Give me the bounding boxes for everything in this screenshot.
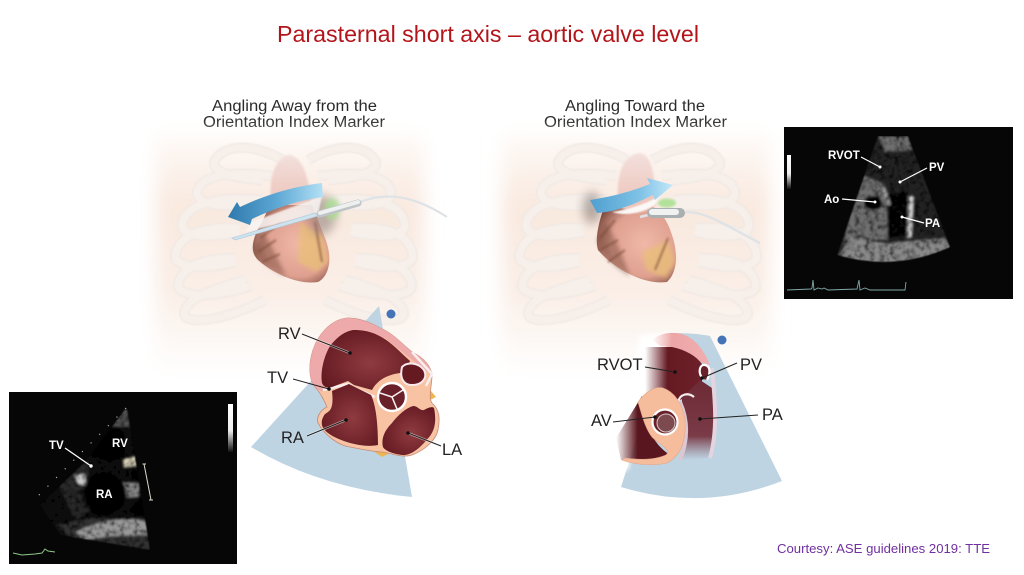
echo label: PV: PV: [929, 162, 945, 174]
chest background glow: [156, 135, 424, 375]
valve leaflet: [678, 394, 694, 402]
heart: [597, 205, 676, 282]
aortic valve: [378, 383, 406, 411]
label: LA: [406, 431, 462, 459]
panel: RVOT/PA short axis diagram: [591, 333, 783, 498]
heading: angling away: Orientation Index Marker: [203, 114, 385, 131]
shadow behind probe: [308, 195, 336, 235]
echo sector with speckle: [56, 408, 150, 550]
caliper: [142, 464, 153, 500]
label: RV: [278, 325, 352, 355]
right ventricle chamber: [321, 330, 410, 390]
yellow fat patches: [372, 385, 436, 457]
aortic root: [622, 388, 685, 465]
rotation arrow pointing right: [590, 178, 673, 213]
heading: angling toward: Orientation Index Marker: [544, 114, 727, 131]
label: RA: [281, 418, 348, 447]
label: PA: PA: [762, 406, 783, 424]
aortic valve ring: [652, 410, 678, 434]
echo background: [9, 392, 237, 564]
echo label: RVOT: RVOT: [828, 150, 860, 162]
heading: angling away: [203, 98, 385, 131]
imaging sector: [251, 306, 412, 497]
label: PA: [698, 406, 783, 424]
echo label: RVOT: [828, 150, 882, 168]
credit text: Courtesy: ASE guidelines 2019: TTE: [777, 541, 990, 556]
RVOT chamber: [645, 347, 702, 402]
lower left dark chamber: [616, 396, 670, 460]
panel: angling toward thorax: [502, 98, 770, 375]
orientation marker dot: [718, 336, 726, 344]
echo depth bar: [787, 155, 791, 189]
panel: echo image bottom left: [9, 392, 237, 564]
right atrium chamber: [322, 384, 378, 446]
rib cage: [175, 148, 413, 320]
label: TV: [267, 369, 331, 391]
title: Parasternal short axis – aortic valve level: [277, 21, 699, 47]
echo label: Ao: Ao: [824, 194, 839, 206]
aorta and great vessels: [271, 155, 312, 210]
aorta and great vessels: [618, 153, 656, 212]
label: RV: RV: [278, 325, 301, 343]
aortic wall strip: [680, 402, 686, 460]
echo label: PA: [900, 216, 940, 230]
imaging plane: [232, 213, 318, 240]
label: RA: RA: [281, 429, 304, 447]
green indicator glow: [658, 198, 676, 208]
heading: angling toward: Angling Toward the: [565, 98, 705, 115]
heading: angling away: Angling Away from the: [212, 98, 377, 115]
chest background glow: [502, 135, 770, 375]
echo label: RV: RV: [112, 438, 128, 450]
ECG trace: [13, 549, 55, 555]
panel: angling away thorax: [156, 98, 447, 375]
right ventricular wall: [652, 333, 710, 365]
white area under arrow: [245, 196, 322, 232]
RVOT chamber: [401, 364, 425, 385]
heart: [253, 205, 329, 283]
rib cage: [519, 148, 757, 320]
heading: angling toward: [544, 98, 727, 131]
probe and cable: [320, 196, 447, 217]
label: LA: LA: [442, 441, 462, 459]
orientation marker dot: [386, 310, 396, 318]
imaging sector: [621, 333, 782, 498]
rotation arrow pointing left: [228, 183, 323, 225]
echo label: TV: [49, 440, 93, 468]
sector edge dots: [32, 408, 126, 502]
echo label: PV: [898, 162, 945, 184]
label: AV: AV: [591, 412, 612, 430]
white highlight under arrow: [612, 196, 660, 214]
echo label: TV: TV: [49, 440, 64, 452]
white septum lines: [323, 352, 432, 397]
echo sector with speckle: [837, 136, 952, 265]
echo background: [784, 127, 1013, 299]
panel: echo image top right: [784, 127, 1013, 299]
label: RVOT: RVOT: [597, 356, 643, 374]
label: TV: TV: [267, 369, 288, 387]
pulmonary wall: [710, 368, 715, 458]
label: PV: [700, 356, 762, 380]
echo label: PA: PA: [925, 218, 940, 230]
label: RVOT: [597, 356, 677, 374]
shadow behind arrow: [583, 192, 601, 224]
green indicator glow: [324, 198, 340, 220]
label: AV: [591, 412, 657, 430]
label: PV: PV: [740, 356, 762, 374]
left atrium chamber: [382, 406, 435, 455]
probe and cable: [640, 212, 760, 243]
echo depth bar: [228, 404, 233, 452]
panel: RV/RA short axis diagram: [251, 306, 462, 497]
pulmonary valve: [700, 365, 709, 380]
echo label: Ao: [824, 194, 876, 206]
heart cross-section outline: [310, 318, 439, 456]
white fade behind left side: [610, 333, 672, 470]
pulmonary artery: [682, 380, 716, 460]
echo label: RA: RA: [96, 489, 113, 501]
right ventricular wall: [310, 318, 432, 392]
ECG trace: [787, 280, 906, 290]
